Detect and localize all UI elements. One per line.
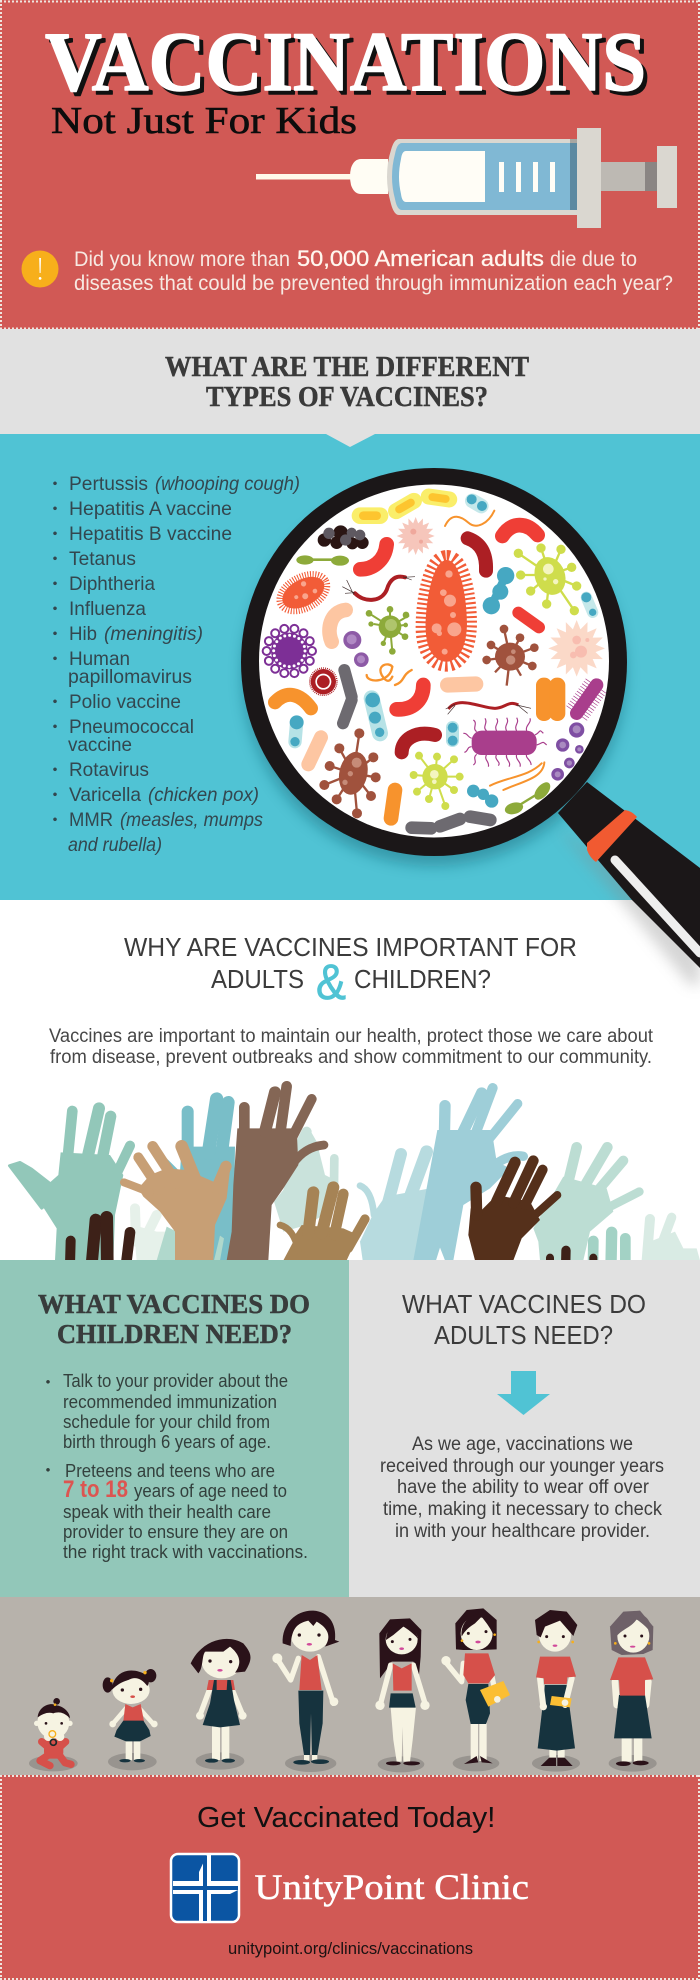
microbe cluster xyxy=(296,491,538,571)
panel: header background xyxy=(0,0,700,329)
text block: did you know xyxy=(74,246,673,295)
text block: adults advice: in with your healthcare provider. xyxy=(395,1521,650,1542)
heading: why vaccines are important: CHILDREN? xyxy=(354,964,491,994)
panel: footer xyxy=(0,1775,700,1980)
heading: why vaccines are important: WHY ARE VACCINES IMPORTANT FOR xyxy=(124,932,577,962)
microbe: small red ring xyxy=(310,668,337,695)
hands: right group xyxy=(360,1088,700,1265)
list: children advice: recommended immunization xyxy=(63,1392,277,1412)
purple ring microbe xyxy=(263,625,316,677)
list: children advice: schedule for your child from xyxy=(63,1412,270,1432)
teal dots xyxy=(290,693,498,808)
text block: adults advice: have the ability to wear off over xyxy=(397,1477,650,1498)
orange and peach beans xyxy=(275,664,544,828)
list: vaccines: Rotavirus xyxy=(69,759,149,781)
heading: children: CHILDREN NEED? xyxy=(57,1319,292,1349)
purple bacterium small xyxy=(577,685,597,713)
green fingers xyxy=(593,1232,625,1265)
panel: people by age xyxy=(0,1597,700,1775)
dark red worm xyxy=(446,703,531,714)
list: vaccines: Hepatitis B vaccine xyxy=(69,523,232,545)
person: child xyxy=(191,1639,250,1770)
text block: adults advice: received through our younger years xyxy=(380,1456,664,1477)
panel: vaccine types heading band xyxy=(0,329,700,434)
text block: adults advice: As we age, vaccinations we xyxy=(412,1434,633,1455)
microbes: upper half of lens xyxy=(263,488,605,686)
list: children advice: years of age need to xyxy=(134,1481,287,1501)
person: woman with folder xyxy=(441,1608,510,1771)
pale hand behind xyxy=(133,1130,338,1260)
footer url: unitypoint.org/clinics/vaccinations xyxy=(228,1939,473,1958)
purple dots xyxy=(551,722,584,781)
list: vaccines: Hepatitis A vaccine xyxy=(69,498,232,520)
list: vaccines: MMR xyxy=(69,809,113,831)
title: VACCINATIONS xyxy=(49,19,650,113)
orange double capsule xyxy=(536,678,565,721)
list: children advice: speak with their health care xyxy=(63,1502,271,1522)
list: children advice: provider to ensure they are on xyxy=(63,1522,288,1542)
pale blobs xyxy=(436,1248,445,1260)
purple bacterium large xyxy=(463,718,547,767)
brown virus xyxy=(482,625,539,686)
teal chain and yellow virus xyxy=(330,543,596,667)
heading: adults: WHAT VACCINES DO xyxy=(402,1289,646,1319)
list: vaccines: Hib xyxy=(69,623,97,645)
brown virus large xyxy=(319,728,381,818)
list: vaccines: Varicella xyxy=(69,784,141,806)
text block: why vaccines matter: from disease, prevent outbreaks and show commitment to our community. xyxy=(50,1047,652,1068)
list: vaccines: Human xyxy=(69,648,130,670)
heading: children: WHAT VACCINES DO xyxy=(38,1289,310,1319)
heading: why vaccines are important: ADULTS xyxy=(211,964,304,994)
list: vaccines: Polio vaccine xyxy=(69,691,181,713)
list: vaccines: Diphtheria xyxy=(69,573,155,595)
yellow chain bacterium xyxy=(352,488,458,524)
paramecium small xyxy=(275,568,332,617)
panel: what vaccines do adults need xyxy=(349,1260,700,1597)
person: teen in trousers xyxy=(272,1611,339,1772)
list: vaccines: (measles, mumps xyxy=(120,809,263,831)
list: vaccines: Tetanus xyxy=(69,548,136,570)
blue hand xyxy=(413,1088,523,1260)
blue hand xyxy=(150,1099,235,1260)
heading: children xyxy=(38,1289,310,1349)
green virus xyxy=(366,606,409,655)
text block: did you know: 50,000 American adults xyxy=(297,246,544,271)
text block: adults advice: time, making it necessary to check xyxy=(383,1499,662,1520)
person: baby xyxy=(29,1698,78,1771)
logo: UnityPoint Clinic: UnityPoint Clinic xyxy=(254,1867,529,1907)
list: vaccines: and rubella) xyxy=(68,834,162,856)
dark fingers xyxy=(70,1217,130,1265)
list: vaccines: (whooping cough) xyxy=(155,473,300,495)
teal hand xyxy=(9,1108,130,1260)
list: children advice: Talk to your provider about the xyxy=(63,1371,288,1391)
dark fingertips xyxy=(550,1250,593,1265)
text block: did you know: die due to xyxy=(550,248,637,271)
person: toddler xyxy=(103,1669,158,1770)
heading: why vaccines are important: & xyxy=(316,954,346,1010)
list: vaccines: Pneumococcal xyxy=(69,716,194,738)
microbes: lower half of lens xyxy=(275,664,597,828)
green dumbbell xyxy=(504,779,553,816)
title: VACCINATIONS xyxy=(45,15,646,109)
list: vaccines xyxy=(53,473,300,856)
logo: UnityPoint Clinic xyxy=(171,1854,529,1922)
yellow virus lower xyxy=(410,752,464,810)
red worm xyxy=(342,577,415,600)
list: children advice: the right track with vaccinations. xyxy=(63,1542,308,1562)
list: children advice: 7 to 18 xyxy=(63,1476,128,1503)
list: children advice xyxy=(46,1371,308,1562)
dark brown hand xyxy=(468,1161,557,1260)
list: vaccines: Pertussis xyxy=(69,473,148,495)
list: vaccines: (meningitis) xyxy=(104,623,203,645)
heading: why vaccines are important xyxy=(124,932,577,1010)
large paramecium xyxy=(426,560,467,662)
list: children advice: birth through 6 years of age. xyxy=(63,1432,271,1452)
tan hand xyxy=(124,1146,230,1260)
list: vaccines: papillomavirus xyxy=(68,666,192,688)
brown hand xyxy=(227,1086,324,1260)
heading: adults: ADULTS NEED? xyxy=(434,1320,613,1350)
list: vaccines: (chicken pox) xyxy=(148,784,259,806)
palest hand xyxy=(645,1217,700,1260)
hands: left group xyxy=(9,1086,365,1265)
panel: vaccine types xyxy=(0,434,700,900)
panel: what vaccines do children need xyxy=(0,1260,349,1597)
icon: magnifying glass xyxy=(241,468,700,985)
heading: types of vaccines xyxy=(165,351,529,413)
tan brown hand xyxy=(280,1187,365,1260)
heading: types of vaccines: WHAT ARE THE DIFFERENT xyxy=(165,351,529,383)
light blue hand xyxy=(360,1152,430,1260)
text block: adults advice xyxy=(380,1434,664,1542)
people: older group xyxy=(375,1608,657,1772)
pale green hand xyxy=(533,1147,639,1260)
person: young woman in shorts xyxy=(375,1618,430,1772)
icon: alert xyxy=(22,250,58,288)
list: vaccines: Influenza xyxy=(69,598,146,620)
list: vaccines: vaccine xyxy=(68,734,132,756)
panel: why vaccines are important background xyxy=(0,900,700,1260)
icon: syringe xyxy=(256,128,677,228)
subtitle: Not Just For Kids xyxy=(51,100,357,142)
people: younger group xyxy=(29,1611,339,1772)
person: older woman xyxy=(609,1611,657,1772)
person: woman in long skirt xyxy=(532,1610,580,1772)
text block: did you know: Did you know more than xyxy=(74,248,290,271)
pale spiky sun xyxy=(548,620,605,677)
icon: down arrow xyxy=(497,1371,550,1415)
text block: did you know: diseases that could be prevented through immunization each year? xyxy=(74,272,673,295)
text block: why vaccines matter xyxy=(49,1026,654,1068)
list: children advice: Preteens and teens who are xyxy=(65,1461,275,1481)
heading: adults xyxy=(402,1289,646,1350)
illustration: raised hands xyxy=(9,1086,700,1265)
heading: types of vaccines: TYPES OF VACCINES? xyxy=(206,381,488,413)
call to action: Get Vaccinated Today! xyxy=(197,1802,496,1834)
text block: why vaccines matter: Vaccines are important to maintain our health, protect those we care about xyxy=(49,1026,654,1047)
